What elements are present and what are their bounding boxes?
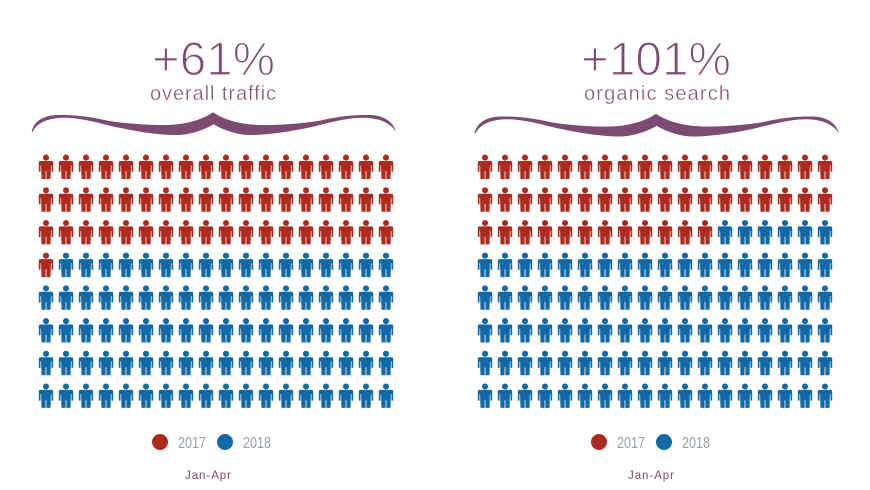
panel: organic search xyxy=(475,32,839,482)
legend xyxy=(591,434,710,452)
pictogram: people 2017 vs 2018 xyxy=(38,155,393,408)
legend xyxy=(152,434,271,452)
panel: overall traffic xyxy=(32,32,396,482)
headline: +101%: +101% xyxy=(581,32,731,85)
date note: Jan-Apr xyxy=(185,470,231,482)
curly brace xyxy=(475,114,839,137)
curly brace xyxy=(32,112,396,135)
legend: 2017 xyxy=(178,435,206,452)
subheading: organic search: organic search xyxy=(584,83,730,105)
legend: 2017 xyxy=(617,435,645,452)
pictogram: people 2017 vs 2018 xyxy=(478,155,832,408)
legend: 2018 xyxy=(682,435,710,452)
legend: 2018 xyxy=(243,435,271,452)
subheading: overall traffic: overall traffic xyxy=(150,83,276,105)
headline: +61%: +61% xyxy=(152,32,275,85)
date note: Jan-Apr xyxy=(628,470,674,482)
